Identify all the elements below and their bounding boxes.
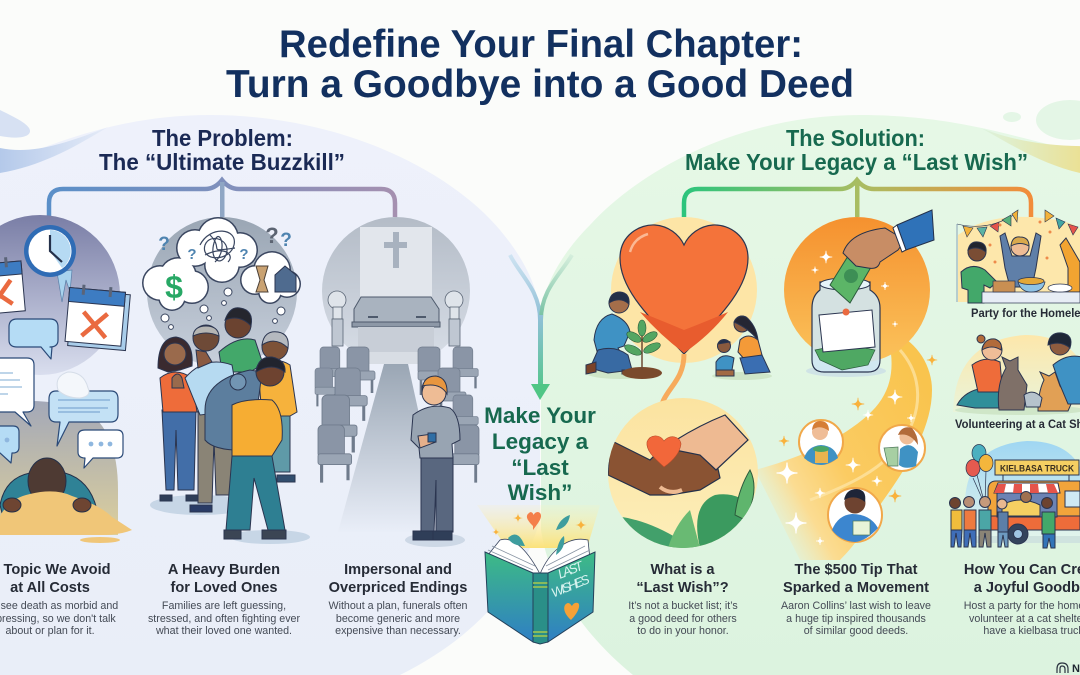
person checking watch	[405, 376, 465, 547]
book cover text: WISHES	[549, 571, 592, 600]
icon: speech bubbles	[0, 319, 123, 468]
truck	[988, 481, 1080, 544]
party guests	[961, 233, 1080, 303]
captions: problem column 3: Overpriced Endings	[329, 580, 467, 596]
captions: solution column 1: a good deed for others	[629, 613, 737, 625]
captions: problem column 2: A Heavy Burden	[168, 562, 280, 578]
icon: tangled scribble	[200, 231, 235, 262]
captions: problem column 2: for Loved Ones	[170, 580, 278, 596]
question marks	[158, 223, 292, 263]
panel: problem background	[0, 115, 540, 675]
logo mark	[1057, 663, 1080, 675]
illustration: tip jar	[784, 210, 934, 377]
illustration: handshake with heart	[600, 398, 760, 548]
person: woman in orange	[158, 337, 198, 501]
icon: small heart	[647, 436, 681, 467]
person planting tree	[586, 292, 654, 379]
illustration: burdened family	[142, 217, 310, 544]
question marks: ?	[280, 230, 292, 251]
arrow: heart to handshake	[651, 354, 684, 427]
icon: book heart	[564, 603, 579, 620]
captions: problem column 1: at All Costs	[10, 580, 90, 596]
icon: hand and sleeve	[843, 210, 934, 268]
queue of people	[950, 496, 1055, 548]
bracket: solution	[684, 180, 1031, 217]
heading: the problem: The Problem:	[152, 125, 293, 151]
illustration: impersonal funeral	[315, 217, 479, 547]
icon: blank tag	[819, 308, 875, 352]
icon: big heart	[620, 225, 748, 354]
captions: problem column 1: about or plan for it.	[5, 625, 95, 637]
icon: dollar sign: $	[165, 269, 183, 305]
cats	[998, 357, 1072, 411]
person: young man with backpack	[205, 357, 286, 539]
woman and child	[712, 316, 772, 380]
person: older man	[185, 325, 240, 512]
person with head in sand	[0, 458, 132, 543]
heading: the solution: Make Your Legacy a “Last Wish”	[685, 149, 1028, 175]
balloons	[966, 444, 993, 505]
icon: hourglass and house	[256, 266, 296, 292]
icon: sapling	[622, 320, 662, 379]
book cover text: LAST	[555, 558, 586, 582]
captions: solution column 2: of similar good deeds.	[804, 625, 908, 637]
icon: casket	[352, 297, 440, 354]
captions: problem column 2: stressed, and often fighting ever	[148, 613, 300, 625]
center heading: “Last	[511, 455, 569, 480]
heading: the problem: The “Ultimate Buzzkill”	[99, 149, 345, 175]
icon: hero portrait 2	[879, 425, 925, 471]
arrow: merging to last wish	[510, 255, 572, 400]
captions: problem column 2: what their loved one wanted.	[155, 625, 292, 637]
icon: frozen clock	[24, 225, 76, 302]
captions: problem column 2: Families are left guessing,	[162, 600, 286, 612]
table and food	[982, 278, 1080, 303]
question marks: ?	[158, 234, 170, 255]
icon: calendar with X, left	[0, 256, 25, 315]
icon: hero portrait 3	[828, 488, 882, 542]
person: green shirt	[219, 308, 263, 372]
illustration: book of last wishes	[477, 505, 600, 644]
illustration: volunteering at a cat shelter	[953, 333, 1080, 431]
book cover text	[549, 558, 592, 600]
illustration: party for the homeless	[957, 210, 1080, 320]
icon: jar	[806, 278, 886, 377]
thought clouds	[142, 217, 301, 311]
icon: hero portrait 1	[799, 420, 843, 465]
party confetti	[988, 220, 1052, 264]
captions: problem column 1	[0, 562, 118, 637]
captions: solution column 1: to do in your honor.	[637, 625, 729, 637]
icon: banknote	[830, 248, 874, 303]
heading: the problem	[99, 125, 345, 175]
illustration: golden stream	[755, 330, 937, 560]
captions: problem column 3: Impersonal and	[344, 562, 452, 578]
illustration: heart and good deeds	[586, 217, 772, 380]
title: Redefine Your Final Chapter:	[279, 23, 803, 66]
title	[226, 23, 854, 106]
captions: solution column 1: What is a	[650, 562, 715, 578]
volunteer woman	[957, 335, 1004, 408]
icon: cross	[384, 232, 407, 268]
captions: problem column 3	[328, 562, 468, 637]
heading: the solution: The Solution:	[786, 125, 925, 151]
heading: the solution	[685, 125, 1028, 175]
captions: solution column 2: Aaron Collins’ last wish to leave	[781, 600, 931, 612]
illustration: kielbasa truck	[950, 441, 1080, 548]
decorative wave: blue	[0, 110, 108, 173]
icon: flower vases	[328, 291, 463, 346]
aisle	[338, 364, 445, 532]
icon: calendar with X, right	[65, 284, 131, 351]
bracket: problem	[49, 180, 395, 217]
captions: solution column 1: “Last Wish”?	[636, 580, 729, 596]
question marks: ?	[187, 246, 197, 263]
captions: problem column 3: Without a plan, funerals often	[328, 600, 468, 612]
captions: problem column 3: become generic and more	[336, 613, 460, 625]
decorative wave: green and yellow	[981, 100, 1080, 175]
panel: solution background	[541, 115, 1080, 675]
captions: solution column 2: The $500 Tip That	[794, 562, 918, 578]
title: Turn a Goodbye into a Good Deed	[226, 63, 854, 106]
center heading: Legacy a	[492, 429, 589, 454]
volunteer man	[1048, 333, 1080, 404]
center heading	[484, 403, 596, 505]
center heading: Make Your	[484, 403, 596, 428]
captions: solution column 3	[964, 562, 1080, 637]
illustration: avoiding the topic	[0, 215, 132, 543]
captions: solution column 1	[628, 562, 738, 637]
person: older woman	[258, 332, 297, 482]
question marks: ?	[239, 246, 249, 263]
bunting	[957, 210, 1078, 237]
captions: problem column 3: expensive than necessary.	[335, 625, 461, 637]
question marks: ?	[265, 223, 279, 248]
captions: solution column 2	[781, 562, 931, 637]
chairs	[315, 347, 479, 483]
captions: problem column 2	[148, 562, 300, 637]
center heading: Wish”	[508, 480, 572, 505]
captions: solution column 2: Sparked a Movement	[783, 580, 929, 596]
captions: solution column 1: It’s not a bucket list; it’s	[628, 600, 738, 612]
captions: solution column 2: a huge tip inspired thousands	[786, 613, 926, 625]
